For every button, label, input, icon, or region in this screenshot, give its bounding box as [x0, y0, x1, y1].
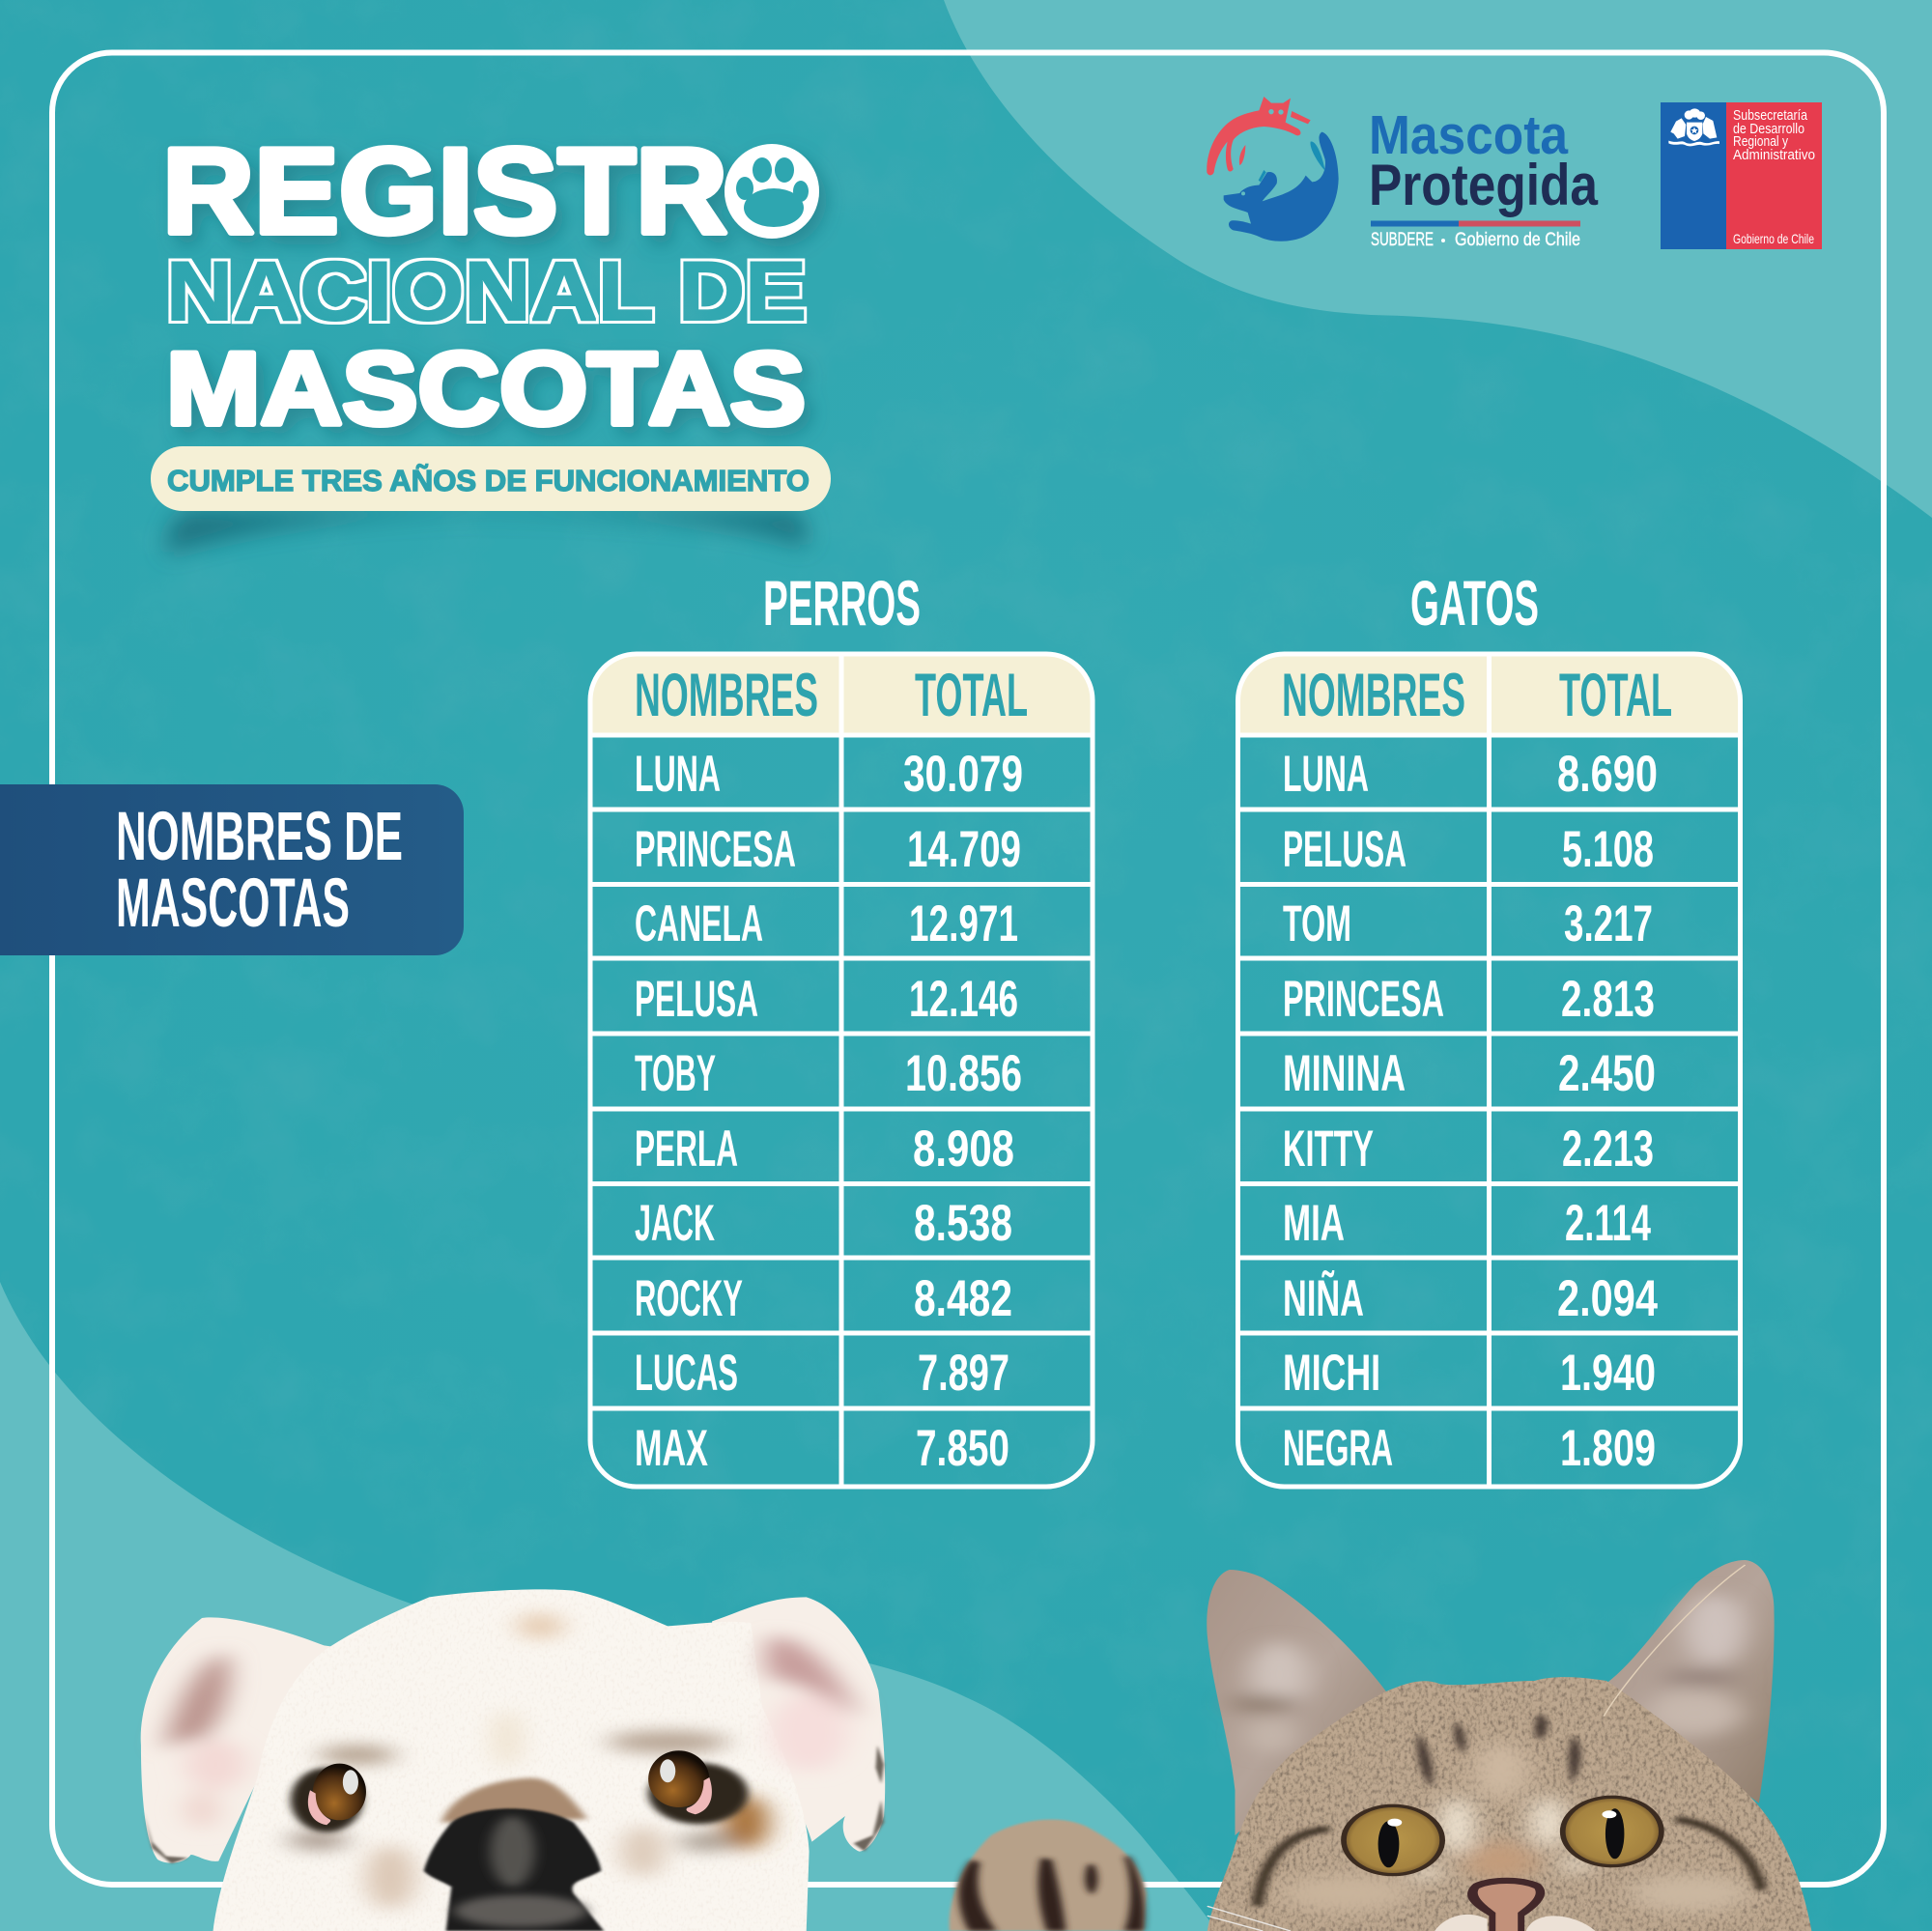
row: pelusa	[635, 971, 1018, 1028]
heading: perros: PERROS	[763, 567, 921, 639]
red panel text: Gobierno de Chile	[1733, 231, 1814, 246]
row: toby: TOBY	[635, 1045, 716, 1102]
row: tom: 3.217	[1564, 895, 1653, 952]
illustration: tabby cat	[1207, 1560, 1811, 1931]
row: lucas: LUCAS	[635, 1345, 738, 1402]
row: rocky: 8.482	[914, 1270, 1012, 1327]
logo wordmark: protegida: Protegida	[1369, 153, 1599, 217]
table header: NOMBRES	[1282, 662, 1465, 729]
heading: gatos: GATOS	[1410, 567, 1539, 639]
row: princesa: PRINCESA	[1283, 971, 1444, 1028]
red panel text: Subsecretaría	[1733, 107, 1808, 124]
row: nina	[1283, 1269, 1658, 1327]
dog fur tones	[288, 1612, 769, 1910]
side tab: nombres de mascotas: MASCOTAS	[116, 866, 350, 942]
red panel text: de Desarrollo	[1733, 121, 1804, 137]
logo caption	[1371, 230, 1580, 250]
row: tom: TOM	[1283, 895, 1351, 952]
cat right eye	[1560, 1796, 1664, 1867]
dog left ear	[141, 1617, 346, 1863]
dog ear inner right	[765, 1635, 862, 1771]
row: max: MAX	[635, 1420, 708, 1477]
row: negra: 1.809	[1560, 1420, 1656, 1477]
row: perla: PERLA	[635, 1121, 738, 1178]
icon: coat of arms	[1668, 108, 1719, 146]
dog muzzle bridge	[440, 1778, 587, 1823]
table: perros	[590, 654, 1093, 1487]
subtitle pill	[151, 446, 831, 554]
cat left ear	[1207, 1570, 1390, 1835]
row: luna: 30.079	[903, 746, 1023, 803]
row: princesa	[635, 821, 1021, 878]
row: toby: 10.856	[905, 1045, 1022, 1102]
logo: subsecretaria	[1661, 102, 1822, 249]
row: pelusa: PELUSA	[635, 971, 758, 1028]
dog ear inner left	[163, 1652, 246, 1829]
logo wordmark: mascota: Mascota	[1369, 104, 1569, 166]
title line: nacional de: NACIONAL DE	[166, 245, 807, 338]
row: lucas: 7.897	[918, 1345, 1009, 1402]
row: minina	[1283, 1045, 1656, 1102]
row: canela: CANELA	[635, 895, 763, 952]
row: princesa: PRINCESA	[635, 821, 796, 878]
cat forehead stripes	[1417, 1713, 1580, 1787]
row: toby	[635, 1045, 1022, 1102]
icon: paw letter O	[724, 144, 819, 239]
row: minina: MININA	[1283, 1045, 1406, 1102]
row: rocky	[635, 1270, 1012, 1327]
row: mia: MIA	[1283, 1195, 1345, 1252]
row: princesa: 14.709	[907, 821, 1021, 878]
row: pelusa: 12.146	[909, 971, 1018, 1028]
side tab: nombres de mascotas: NOMBRES DE	[116, 799, 403, 875]
title word: registro: REGISTR	[162, 123, 727, 259]
row: luna: 8.690	[1557, 746, 1658, 803]
title	[162, 123, 819, 446]
table header: TOTAL	[1559, 662, 1672, 729]
row: luna: LUNA	[1283, 746, 1369, 803]
row: luna: LUNA	[635, 746, 721, 803]
row: michi: MICHI	[1283, 1345, 1380, 1402]
row: jack	[635, 1195, 1012, 1252]
cat head	[1208, 1677, 1811, 1931]
row: minina: 2.450	[1558, 1045, 1656, 1102]
cat whiskers	[1208, 1565, 1746, 1931]
table grid	[590, 654, 1093, 1487]
dog head	[213, 1589, 810, 1931]
table header: NOMBRES	[635, 662, 818, 729]
logo: mascota protegida	[1207, 97, 1599, 250]
row: pelusa: 5.108	[1562, 821, 1654, 878]
row: pelusa: PELUSA	[1283, 821, 1406, 878]
illustration: bulldog	[141, 1589, 885, 1931]
dog right ear	[712, 1597, 885, 1852]
table: gatos	[1238, 654, 1741, 1487]
dog right eye	[648, 1750, 748, 1824]
dog left eye	[291, 1764, 366, 1832]
cat ear highlights	[1230, 1594, 1746, 1753]
row: michi	[1283, 1345, 1656, 1402]
row: jack: JACK	[635, 1195, 715, 1252]
row: lucas	[635, 1345, 1009, 1402]
logo caption: Gobierno de Chile	[1455, 230, 1580, 250]
row: max: 7.850	[916, 1420, 1009, 1477]
row: perla	[635, 1121, 1014, 1178]
logo rule	[1371, 220, 1580, 226]
row: kitty: KITTY	[1283, 1121, 1374, 1178]
title word: mascotas: MASCOTAS	[166, 330, 806, 446]
red panel text	[1733, 107, 1815, 246]
row: nina: NIÑA	[1283, 1269, 1364, 1327]
top right wave	[944, 0, 1932, 518]
cat cheek stripes	[1257, 1819, 1762, 1906]
logo caption: SUBDERE	[1371, 230, 1434, 250]
row: mia	[1283, 1195, 1651, 1252]
illustration: cat paw	[950, 1820, 1147, 1931]
side tab: nombres de mascotas	[0, 784, 464, 955]
icon: red cat and blue dog circle	[1207, 97, 1339, 241]
cat nose and muzzle	[1435, 1878, 1596, 1931]
red panel text: Regional y	[1733, 133, 1788, 150]
cat face lights	[1279, 1742, 1750, 1913]
cat right ear	[1601, 1560, 1775, 1803]
row: luna	[635, 746, 1023, 803]
row: mia: 2.114	[1565, 1195, 1651, 1252]
table header	[1238, 654, 1741, 735]
row: rocky: ROCKY	[635, 1270, 743, 1327]
row: negra: NEGRA	[1283, 1420, 1393, 1477]
row: kitty: 2.213	[1562, 1121, 1654, 1178]
row: tom	[1283, 895, 1653, 952]
row: perla: 8.908	[913, 1121, 1014, 1178]
subtitle pill: CUMPLE TRES AÑOS DE FUNCIONAMIENTO	[167, 464, 810, 497]
row: kitty	[1283, 1121, 1654, 1178]
row: nina: 2.094	[1557, 1270, 1658, 1327]
bottom left wave	[0, 1282, 1217, 1931]
table header	[590, 654, 1093, 735]
cat left eye	[1341, 1804, 1445, 1876]
row: max	[635, 1420, 1009, 1477]
row: luna	[1283, 746, 1658, 803]
row: canela: 12.971	[909, 895, 1018, 952]
row: negra	[1283, 1420, 1656, 1477]
table grid	[1238, 654, 1741, 1487]
row: pelusa	[1283, 821, 1654, 878]
row: michi: 1.940	[1560, 1345, 1656, 1402]
red panel text: Administrativo	[1733, 147, 1815, 163]
row: princesa: 2.813	[1561, 971, 1655, 1028]
table header: TOTAL	[915, 662, 1028, 729]
row: canela	[635, 895, 1018, 952]
dog ear tips	[144, 1746, 884, 1863]
dog nose	[424, 1808, 604, 1931]
paw claws	[959, 1857, 1145, 1931]
row: jack: 8.538	[914, 1195, 1012, 1252]
